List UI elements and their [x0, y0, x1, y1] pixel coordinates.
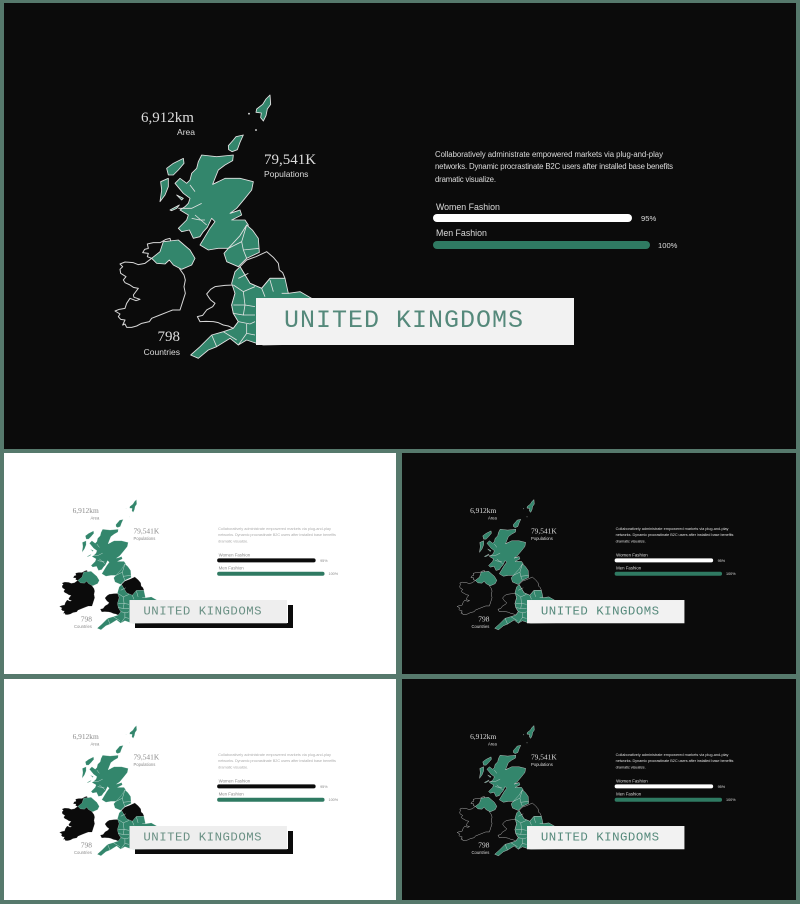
slide content: dramatic visualize. [616, 540, 646, 544]
stat: countries: Countries [144, 347, 180, 357]
panel: light slide bottom [4, 679, 396, 900]
slide content: Women Fashion [616, 778, 648, 783]
slide content: networks. Dynamic procrastinate B2C users after installed base benefits [218, 759, 336, 763]
slide content: UNITED KINGDOMS [541, 604, 660, 618]
description text: networks. Dynamic procrastinate B2C users after installed base benefits [435, 162, 673, 171]
slide content: Countries [471, 850, 489, 855]
stat: populations: Populations [264, 169, 308, 179]
slide content: 6,912km [470, 732, 496, 741]
description text [435, 150, 673, 184]
stat: area [141, 110, 195, 137]
slide content: 95% [718, 559, 726, 563]
slide content: Women Fashion [219, 552, 251, 557]
slide content [60, 726, 339, 856]
slide content: 6,912km [73, 506, 99, 515]
slide content: networks. Dynamic procrastinate B2C users after installed base benefits [218, 533, 336, 537]
slide content: dramatic visualize. [616, 766, 646, 770]
slide content: Populations [133, 762, 155, 767]
slide content: Women Fashion [616, 552, 648, 557]
slide content: Countries [74, 850, 92, 855]
slide content: Populations [531, 762, 553, 767]
stat: area: 6,912km [141, 110, 194, 126]
slide content: 79,541K [531, 753, 557, 762]
slide content: Countries [471, 624, 489, 629]
slide content [60, 500, 339, 630]
slide content: 798 [478, 614, 490, 623]
description text: Collaboratively administrate empowered markets via plug-and-play [435, 150, 663, 159]
stat: populations [264, 152, 316, 179]
slide content [457, 500, 736, 630]
bar: women fashion [433, 202, 656, 223]
panel: main dark slide [4, 3, 796, 449]
slide content: 6,912km [73, 732, 99, 741]
slide content: 798 [478, 840, 490, 849]
title box: UNITED KINGDOMS [284, 306, 524, 335]
slide content: Area [488, 515, 497, 520]
slide content: networks. Dynamic procrastinate B2C users after installed base benefits [616, 533, 733, 537]
slide content: Area [488, 741, 497, 746]
slide content: 100% [726, 572, 736, 576]
panel: dark slide top [402, 453, 796, 674]
slide content: 95% [320, 559, 328, 563]
slide content: 79,541K [133, 753, 160, 762]
description text: dramatic visualize. [435, 175, 496, 184]
stat: populations: 79,541K [264, 152, 316, 168]
slide content: 79,541K [531, 527, 557, 536]
slide content: 100% [726, 798, 736, 802]
slide content: 100% [329, 572, 339, 576]
slide content: 95% [320, 785, 328, 789]
slide content: dramatic visualize. [218, 766, 248, 770]
slide content: 95% [718, 785, 726, 789]
slide content: Collaboratively administrate empowered markets via plug-and-play [218, 527, 331, 531]
slide content: UNITED KINGDOMS [541, 830, 660, 844]
slide content: Collaboratively administrate empowered markets via plug-and-play [616, 527, 729, 531]
title box [256, 298, 574, 345]
slide content: networks. Dynamic procrastinate B2C users after installed base benefits [616, 759, 733, 763]
stat: countries [144, 329, 180, 357]
stat: countries: 798 [158, 329, 180, 345]
slide content: 79,541K [133, 527, 160, 536]
slide content: UNITED KINGDOMS [143, 830, 262, 844]
slide content [457, 726, 736, 856]
slide content: 798 [81, 614, 92, 623]
title shadow bracket [135, 605, 293, 628]
slide content: Populations [531, 536, 553, 541]
bar: women fashion: Women Fashion [436, 202, 500, 212]
slide content: 6,912km [470, 506, 496, 515]
panel: dark slide bottom [402, 679, 796, 900]
slide content: dramatic visualize. [218, 540, 248, 544]
slide content: 100% [329, 798, 339, 802]
title shadow bracket [135, 831, 293, 854]
slide content: Men Fashion [219, 565, 244, 570]
slide content: Women Fashion [219, 778, 251, 783]
slide content: UNITED KINGDOMS [143, 604, 262, 618]
slide content: Area [90, 741, 100, 746]
slide content: Countries [74, 624, 92, 629]
bar: men fashion: Men Fashion [436, 228, 487, 238]
map of UK and Ireland [115, 95, 313, 358]
bar: men fashion [433, 228, 678, 250]
slide content: Area [90, 515, 100, 520]
slide content: Men Fashion [616, 565, 642, 570]
stat: area: Area [177, 127, 195, 137]
bar: men fashion: 100% [658, 241, 678, 250]
slide content: Men Fashion [219, 791, 244, 796]
slide content: Populations [133, 536, 155, 541]
panel: light slide top [4, 453, 396, 674]
slide content: Men Fashion [616, 791, 642, 796]
bar: women fashion: 95% [641, 214, 656, 223]
slide content: Collaboratively administrate empowered markets via plug-and-play [218, 753, 331, 757]
slide content: Collaboratively administrate empowered markets via plug-and-play [616, 753, 729, 757]
slide content: 798 [81, 840, 92, 849]
